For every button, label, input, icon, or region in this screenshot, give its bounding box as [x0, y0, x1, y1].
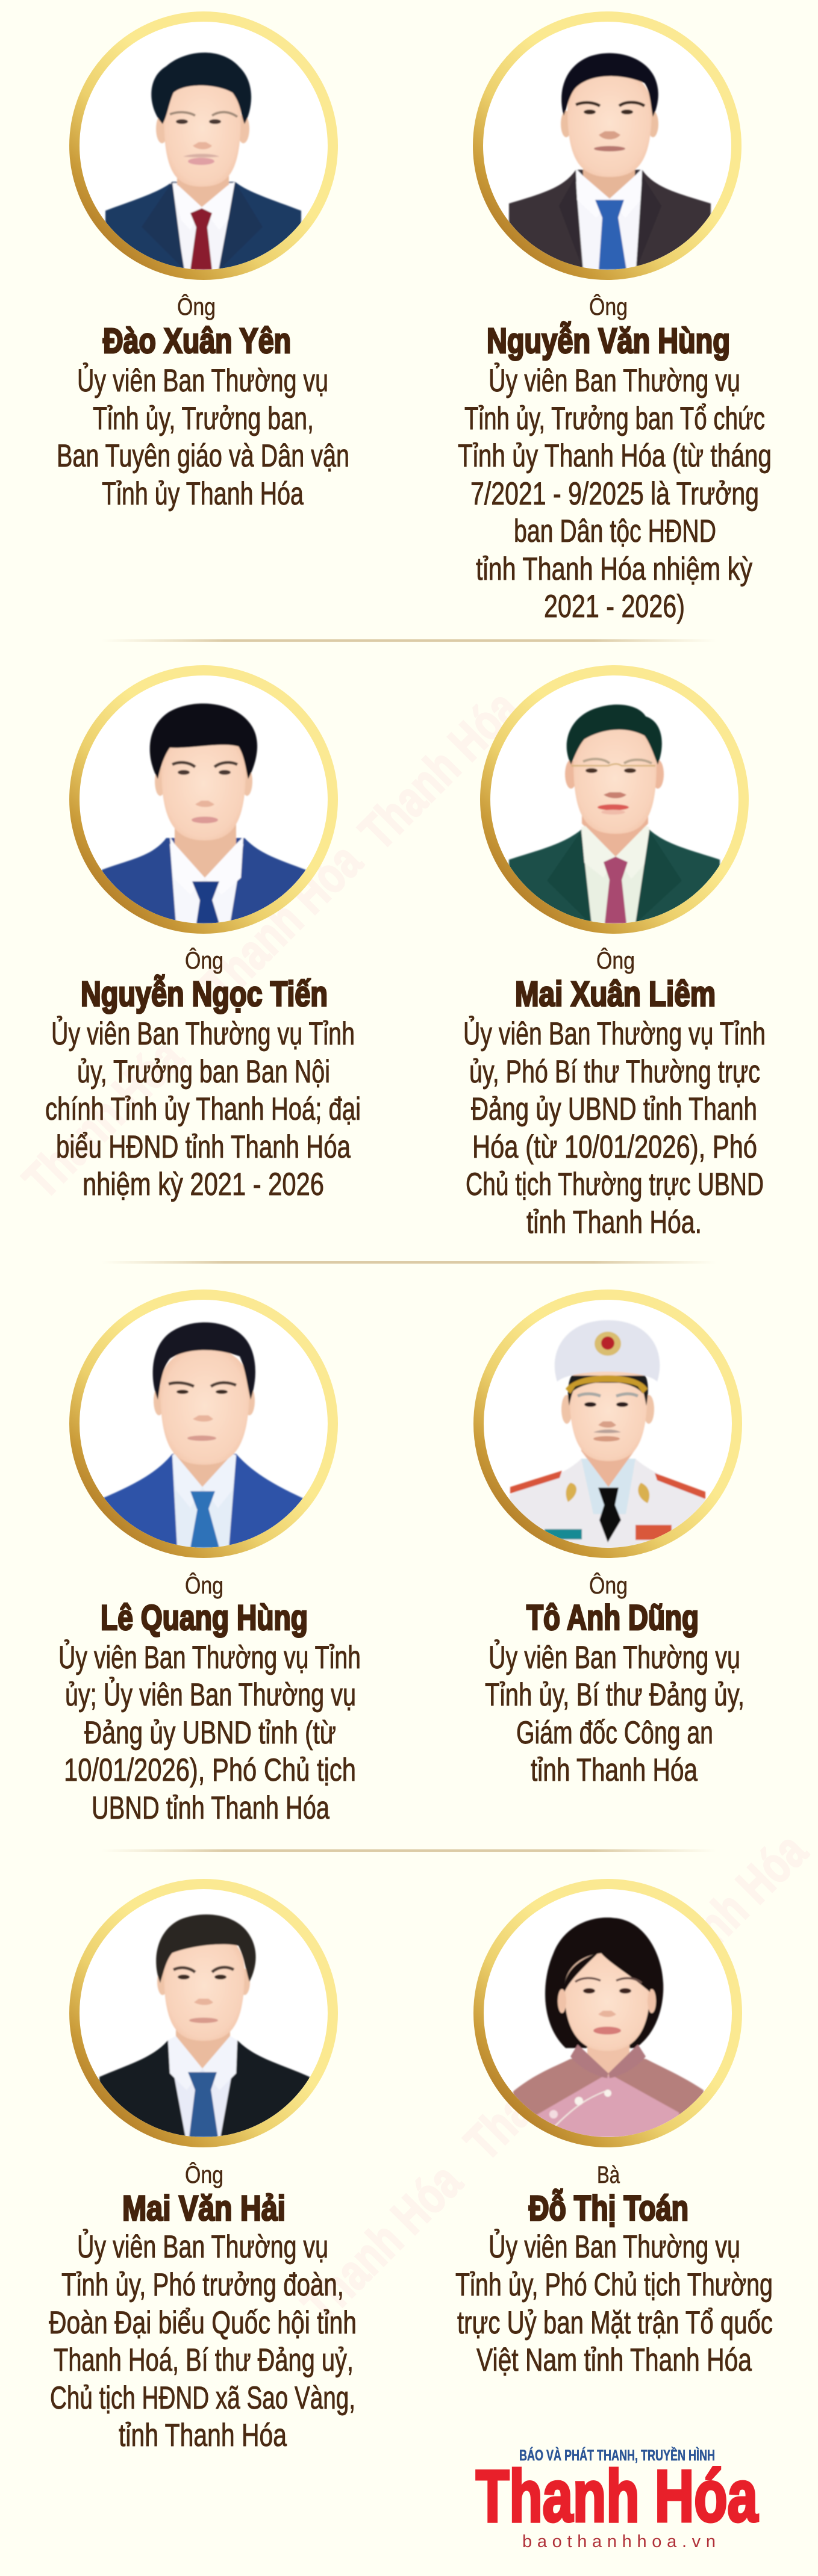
role text: ủy, Trưởng ban Ban Nội	[77, 1054, 330, 1090]
logo: Thanh Hóa newspaper: baothanhhoa.vn	[522, 2532, 716, 2551]
role text	[458, 362, 772, 624]
role text	[58, 1639, 361, 1826]
role text: Tỉnh ủy, Bí thư Đảng ủy,	[485, 1677, 745, 1713]
role text: Ủy viên Ban Thường vụ Tỉnh	[51, 1016, 355, 1052]
role text	[485, 1639, 745, 1788]
watermarks: Thanh Hóa	[192, 832, 372, 1013]
role text: ban Dân tộc HĐND	[514, 514, 716, 549]
portrait: Nguyễn Văn Hùng	[478, 17, 736, 275]
watermarks: Thanh Hóa	[454, 1990, 635, 2171]
panel: Tô Anh Dũng	[478, 1294, 745, 1788]
portrait: Nguyễn Ngọc Tiến	[75, 671, 333, 928]
salutation: Ông	[185, 1572, 223, 1599]
role text: Giám đốc Công an	[516, 1715, 713, 1751]
panel: Nguyễn Ngọc Tiến	[45, 671, 361, 1202]
salutation: Ông	[596, 947, 635, 974]
role text: biểu HĐND tỉnh Thanh Hóa	[56, 1129, 351, 1165]
name: Lê Quang Hùng	[101, 1598, 308, 1637]
name: Nguyễn Ngọc Tiến	[81, 975, 328, 1014]
name: Tô Anh Dũng	[526, 1598, 699, 1637]
role text: chính Tỉnh ủy Thanh Hoá; đại	[45, 1091, 361, 1127]
name: Mai Văn Hải	[122, 2189, 286, 2228]
role text	[455, 2229, 773, 2378]
role text	[463, 1016, 766, 1240]
panel: Lê Quang Hùng	[58, 1294, 361, 1826]
portrait: Mai Xuân Liêm	[485, 671, 743, 928]
portrait: Tô Anh Dũng	[478, 1294, 737, 1553]
role text: nhiệm kỳ 2021 - 2026	[83, 1167, 324, 1202]
role text: Tỉnh ủy, Trưởng ban,	[93, 401, 314, 436]
role text	[57, 362, 349, 512]
salutation: Ông	[589, 1572, 628, 1599]
panel: Mai Văn Hải	[49, 1884, 357, 2453]
watermarks: Thanh Hóa	[349, 679, 529, 860]
panel: Đào Xuân Yên	[57, 17, 349, 512]
watermarks: Thanh Hóa	[292, 2152, 472, 2333]
role text: tỉnh Thanh Hóa	[531, 1752, 698, 1788]
role text: 2021 - 2026)	[544, 589, 685, 624]
role text: Ủy viên Ban Thường vụ	[77, 2229, 328, 2265]
role text: tỉnh Thanh Hóa	[119, 2418, 287, 2453]
name: Đỗ Thị Toán	[529, 2189, 688, 2228]
portrait: Đỗ Thị Toán	[478, 1884, 737, 2142]
panel: Mai Xuân Liêm	[463, 671, 766, 1240]
salutation: Ông	[177, 293, 216, 320]
role text: Thanh Hoá, Bí thư Đảng uỷ,	[54, 2342, 354, 2378]
role text: Ban Tuyên giáo và Dân vận	[57, 438, 349, 474]
role text: Ủy viên Ban Thường vụ	[77, 362, 328, 399]
role text: ủy; Ủy viên Ban Thường vụ	[65, 1677, 356, 1713]
salutation: Ông	[589, 293, 628, 320]
salutation: Ông	[185, 2161, 223, 2188]
role text: Chủ tịch HĐND xã Sao Vàng,	[50, 2380, 355, 2416]
role text: tỉnh Thanh Hóa.	[526, 1205, 702, 1240]
portrait: Mai Văn Hải	[75, 1884, 333, 2142]
role text: UBND tỉnh Thanh Hóa	[92, 1790, 329, 1826]
role text: Tỉnh ủy Thanh Hóa	[102, 476, 304, 512]
role text: Ủy viên Ban Thường vụ	[489, 362, 740, 399]
portrait: Lê Quang Hùng	[75, 1294, 333, 1553]
name: Mai Xuân Liêm	[515, 975, 716, 1014]
role text: 10/01/2026), Phó Chủ tịch	[64, 1752, 356, 1788]
role text: Đảng ủy UBND tỉnh (từ	[84, 1715, 336, 1751]
role text: Ủy viên Ban Thường vụ	[489, 1639, 740, 1675]
salutation: Ông	[185, 947, 223, 974]
watermarks	[13, 679, 817, 2333]
role text: Ủy viên Ban Thường vụ Tỉnh	[58, 1639, 361, 1675]
role text: Ủy viên Ban Thường vụ	[489, 2229, 740, 2265]
name: Đào Xuân Yên	[103, 321, 291, 361]
logo: Thanh Hóa newspaper: BÁO VÀ PHÁT THANH, TRUYỀN HÌNH	[519, 2447, 715, 2464]
panel: Nguyễn Văn Hùng	[458, 17, 772, 624]
watermarks: Thanh Hóa	[13, 1028, 193, 1209]
panel: Đỗ Thị Toán	[455, 1884, 773, 2378]
salutation: Bà	[597, 2162, 620, 2188]
role text: Tỉnh ủy, Phó trưởng đoàn,	[61, 2267, 344, 2303]
role text: Đoàn Đại biểu Quốc hội tỉnh	[49, 2305, 357, 2341]
role text	[49, 2229, 357, 2453]
portrait: Đào Xuân Yên	[75, 17, 333, 275]
logo: Thanh Hóa newspaper	[476, 2447, 758, 2551]
name: Nguyễn Văn Hùng	[487, 321, 730, 361]
role text	[45, 1016, 361, 1202]
